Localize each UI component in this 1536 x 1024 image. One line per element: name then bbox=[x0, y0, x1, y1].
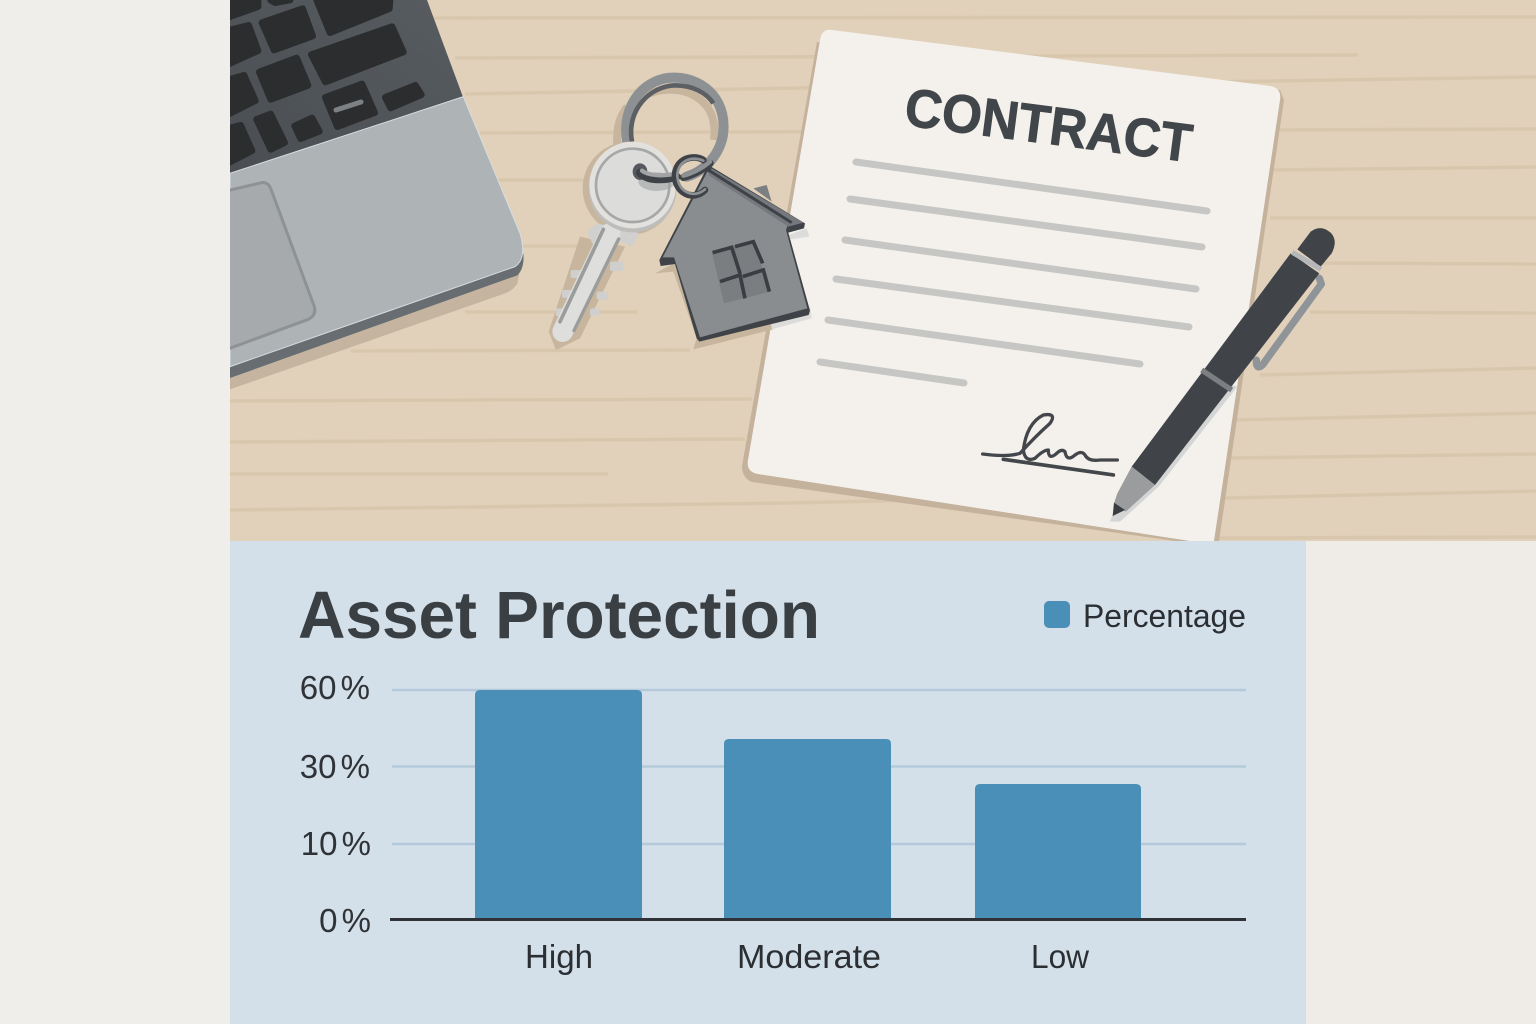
house tag paper shadow bbox=[772, 307, 812, 329]
pen middle ring bbox=[1202, 370, 1232, 390]
grid lines bbox=[392, 690, 1246, 844]
laptop side edge bbox=[230, 253, 524, 378]
wooden desk surface bbox=[230, 0, 1536, 541]
key teeth bbox=[556, 262, 623, 316]
laptop key glyph bar bbox=[336, 102, 361, 110]
laptop trackpad bbox=[223, 183, 315, 351]
bar: Low bbox=[975, 784, 1141, 919]
panel: asset protection chart bbox=[230, 541, 1306, 1024]
laptop shadow on desk bbox=[230, 270, 520, 389]
left page margin bbox=[0, 0, 230, 1024]
chart title: Asset Protection bbox=[298, 578, 820, 653]
bar: High bbox=[475, 690, 642, 919]
key ring bbox=[626, 78, 724, 177]
ring shadow bbox=[617, 90, 714, 145]
house tag window bbox=[712, 240, 770, 303]
y axis labels: 10 % bbox=[301, 825, 371, 862]
contract heading: CONTRACT bbox=[901, 77, 1196, 174]
legend: Percentage bbox=[1083, 598, 1246, 634]
house tag chimney bbox=[753, 185, 772, 202]
laptop keys bbox=[230, 0, 421, 162]
chart background bbox=[230, 541, 1306, 1024]
key shadow bbox=[549, 142, 676, 350]
paper shadow bbox=[742, 42, 1284, 541]
x axis bbox=[390, 918, 1246, 921]
x axis labels bbox=[525, 938, 1089, 975]
pen barrel bbox=[1132, 253, 1319, 485]
pen bbox=[1110, 228, 1335, 522]
house tag roof edge bbox=[708, 168, 803, 227]
y axis labels bbox=[300, 669, 371, 939]
x axis labels: Moderate bbox=[737, 938, 881, 975]
y axis labels: 30 % bbox=[300, 748, 370, 785]
keys and house keychain bbox=[549, 78, 812, 350]
x axis labels: High bbox=[525, 938, 593, 975]
house tag bbox=[659, 165, 810, 342]
contract text lines bbox=[820, 162, 1207, 383]
house tag shadow bbox=[655, 260, 773, 349]
paper sheet bbox=[748, 30, 1280, 541]
pen silver band bbox=[1292, 252, 1321, 269]
pen nib bbox=[1113, 503, 1125, 516]
pen clip bbox=[1256, 278, 1321, 367]
key loop link bbox=[640, 157, 710, 195]
key head bbox=[589, 142, 677, 232]
pen cap bbox=[1297, 228, 1335, 267]
key blade bbox=[556, 223, 639, 332]
bar: Moderate bbox=[724, 739, 891, 919]
right page margin bbox=[1306, 541, 1536, 1024]
y axis labels: 60 % bbox=[300, 669, 370, 706]
laptop keyboard deck bbox=[230, 0, 463, 174]
laptop bbox=[223, 0, 524, 389]
contract document bbox=[742, 30, 1284, 541]
pen highlight edge bbox=[1110, 385, 1237, 522]
y axis labels: 0 % bbox=[319, 902, 371, 939]
pen grip cone bbox=[1114, 467, 1155, 512]
signature bbox=[983, 415, 1117, 475]
laptop palm rest bbox=[230, 97, 523, 367]
panel: desk scene bbox=[223, 0, 1536, 541]
x axis labels: Low bbox=[1031, 938, 1089, 975]
